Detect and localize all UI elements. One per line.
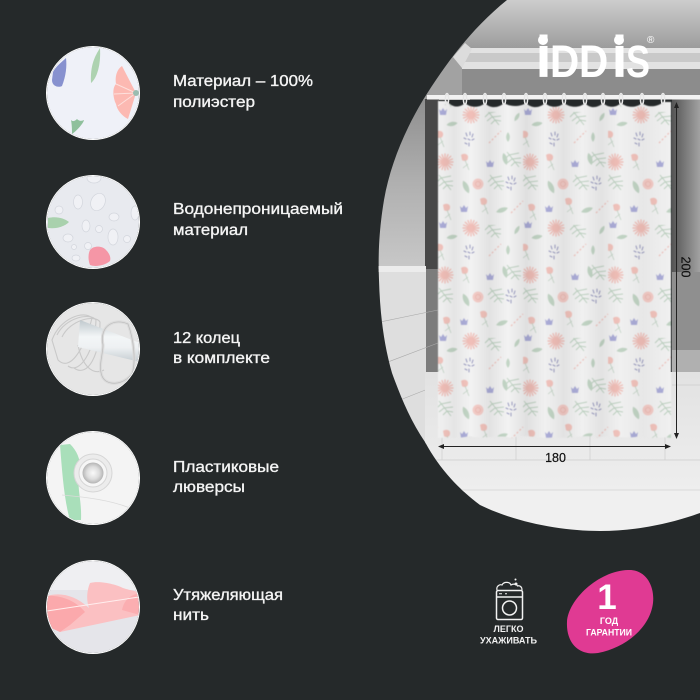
feature 5 text: Утяжеляющая	[173, 587, 283, 604]
badge: 1 year warranty: ГАРАНТИИ	[586, 628, 632, 638]
badge: 1 year warranty: ГОД	[600, 616, 619, 626]
feature 5 text: нить	[173, 607, 209, 624]
dark recess left of curtain	[425, 99, 439, 269]
feature 5: weighted thread thumbnail	[46, 560, 140, 654]
curtain rod	[427, 95, 700, 100]
logo: iDDiS: ®	[647, 35, 655, 46]
ceiling	[458, 0, 700, 50]
feature 2: waterproof thumbnail	[46, 173, 140, 268]
dimension: width 180	[438, 444, 671, 465]
feature 1 text	[173, 73, 313, 111]
curtain fabric	[438, 101, 671, 438]
left wall	[378, 99, 425, 269]
dimension: height 200: 200	[678, 257, 692, 277]
feature 1 text: полиэстер	[173, 94, 255, 111]
curtain rings	[445, 94, 665, 104]
dimension: width 180: 180	[545, 451, 566, 465]
caption: easy care	[480, 624, 538, 646]
feature 3 text: в комплекте	[173, 350, 270, 367]
logo: iDDiS	[536, 25, 655, 90]
feature 1: material thumbnail	[46, 46, 140, 140]
crown molding	[465, 53, 700, 62]
badge: 1 year warranty: 1	[597, 578, 617, 617]
crown molding bright bands	[462, 48, 700, 69]
feature 4 text: Пластиковые	[173, 459, 279, 476]
logo: iDDiS: S	[626, 36, 650, 87]
floor	[462, 490, 700, 531]
dimension: height 200	[674, 102, 692, 439]
right wall	[672, 99, 700, 274]
feature 4 text	[173, 459, 279, 496]
lower left tiled wall	[378, 266, 426, 444]
rings behind the rod	[52, 315, 104, 372]
feature 1 text: Материал – 100%	[173, 73, 313, 90]
crown molding corner	[453, 43, 472, 68]
feature 2 text: материал	[173, 222, 248, 239]
feature 2 text	[173, 201, 343, 239]
badge: 1 year warranty	[567, 570, 653, 653]
upper wall	[462, 69, 700, 95]
logo: iDDiS: i	[612, 25, 628, 90]
logo: iDDiS: i	[536, 25, 552, 90]
feature 4: grommet thumbnail	[46, 432, 140, 524]
logo: iDDiS: D	[550, 37, 579, 88]
panel: bathroom scene with curtain	[370, 0, 700, 535]
feature 2 text: Водонепроницаемый	[173, 201, 343, 218]
left side wall top	[423, 50, 470, 100]
tiled wall	[425, 372, 700, 492]
feature 3 text	[173, 330, 270, 367]
caption: easy care: УХАЖИВАТЬ	[480, 636, 538, 646]
feature 5 text	[173, 587, 283, 624]
logo: iDDiS: D	[579, 37, 608, 88]
icon: washing machine	[496, 578, 522, 620]
feature 3 text: 12 колец	[173, 330, 240, 347]
feature 4 text: люверсы	[173, 479, 245, 496]
feature 3: rings thumbnail	[46, 302, 140, 396]
caption: easy care: ЛЕГКО	[494, 624, 523, 634]
